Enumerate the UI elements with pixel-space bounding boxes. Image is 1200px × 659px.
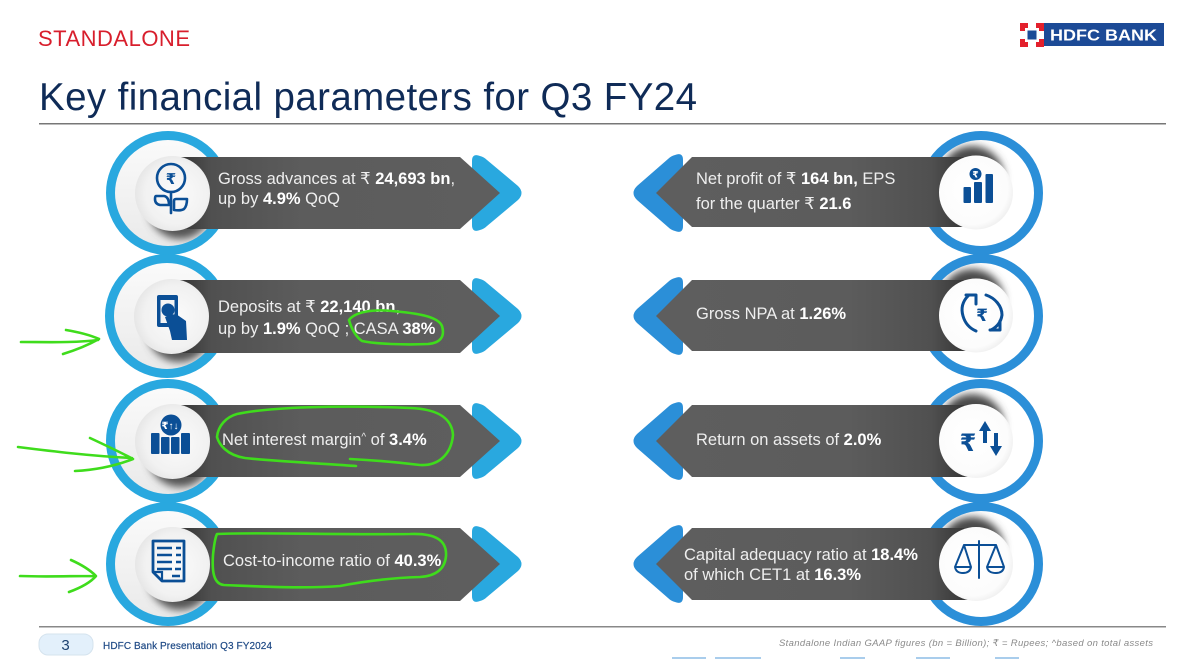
text: gross advances: Gross advances at ₹ 24,693 bn, xyxy=(218,170,455,188)
banner: deposits xyxy=(172,280,500,353)
panel: cost-to-income xyxy=(110,506,522,622)
arrow: net interest margin annotation xyxy=(18,438,133,471)
banner: cost-to-income xyxy=(172,528,500,601)
panel: gross NPA xyxy=(634,258,1039,374)
text: capital adequacy: Capital adequacy ratio at 18.4% xyxy=(684,546,918,564)
text: net interest margin: of xyxy=(366,431,389,449)
panel: gross advances: up by 4.9% QoQ xyxy=(218,190,340,208)
banner: return on assets xyxy=(656,405,976,477)
icon: rupee cycle: ₹ xyxy=(976,306,988,325)
icon: rupee plant xyxy=(155,164,187,213)
icon: rupee bar chart: ₹ xyxy=(972,170,979,180)
footnote: Standalone Indian GAAP figures (bn = Billion); ₹ = Rupees; ^based on total assets xyxy=(779,638,1153,649)
text: net interest margin: ^ xyxy=(361,432,366,443)
title: Key financial parameters for Q3 FY24 xyxy=(39,76,697,119)
panel: capital adequacy xyxy=(634,506,1039,622)
icon: document xyxy=(153,541,184,581)
banner: net interest margin xyxy=(172,405,500,477)
text: net profit: Net profit of ₹ 164 bn, EPS xyxy=(696,170,895,188)
footer rule xyxy=(39,626,1166,628)
section label: STANDALONE: STANDALONE xyxy=(38,26,190,51)
text: cost-to-income: Cost-to-income ratio of 40.3% xyxy=(223,552,442,570)
text: deposits: Deposits at ₹ 22,140 bn, xyxy=(218,298,400,316)
icon: rupee bars: ₹↑↓ xyxy=(162,421,178,432)
page number pill xyxy=(39,634,93,655)
icon: rupee bars xyxy=(151,414,190,454)
banner: gross NPA xyxy=(656,280,976,351)
icon: rupee up down xyxy=(960,421,1002,457)
panel: net interest margin xyxy=(110,383,522,499)
bottom edge artifacts xyxy=(672,657,1019,659)
text: gross NPA: Gross NPA at 1.26% xyxy=(696,305,846,323)
highlight: cost-to-income circle xyxy=(213,533,446,587)
banner: net profit xyxy=(656,157,976,227)
text: net interest margin: 3.4% xyxy=(389,431,427,449)
logo: HDFC Bank xyxy=(1020,23,1164,47)
panel: deposits xyxy=(109,258,522,374)
icon: hand holding phone xyxy=(157,295,187,340)
text: net interest margin: Net interest margin xyxy=(222,431,361,449)
panel: deposits: up by 1.9% QoQ ; CASA 38% xyxy=(218,320,436,338)
panel: net profit: for the quarter ₹ 21.6 xyxy=(696,195,851,213)
icon: rupee plant: ₹ xyxy=(166,171,176,188)
text: return on assets: Return on assets of 2.0% xyxy=(696,431,882,449)
panel: gross advances xyxy=(110,135,522,251)
panel: net profit xyxy=(634,135,1039,251)
banner: capital adequacy xyxy=(656,528,976,600)
page number pill: 3 xyxy=(61,637,70,654)
logo: HDFC Bank: HDFC BANK xyxy=(1050,28,1157,44)
footer text: HDFC Bank Presentation Q3 FY2024 xyxy=(103,641,272,652)
icon: rupee bar chart xyxy=(964,168,993,203)
icon: rupee up down: ₹ xyxy=(960,430,976,457)
icon: scales xyxy=(955,541,1004,578)
arrow: deposits annotation xyxy=(21,330,99,354)
panel: capital adequacy: of which CET1 at 16.3% xyxy=(684,566,861,584)
banner: gross advances xyxy=(172,157,500,229)
highlight: NIM circle xyxy=(217,407,453,466)
highlight: CASA circle xyxy=(349,310,443,344)
arrow: cost-to-income annotation xyxy=(20,560,96,592)
icon: rupee cycle xyxy=(962,295,1002,331)
panel: return on assets xyxy=(634,383,1039,499)
